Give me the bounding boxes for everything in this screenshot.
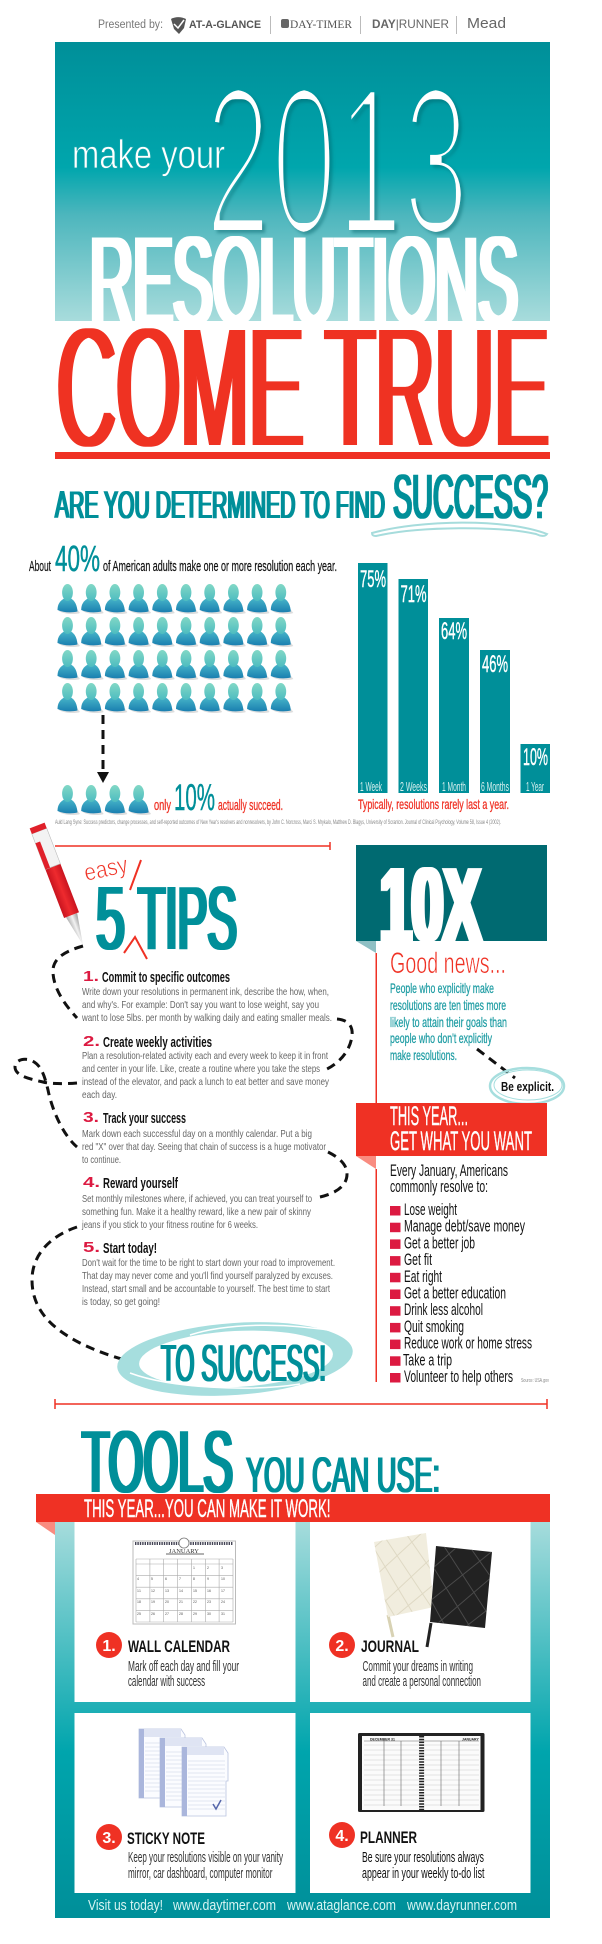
bar: 6 months: 46% <box>482 651 508 678</box>
bar chart: how long resolutions last <box>358 563 550 794</box>
callout: to success scribble: TO SUCCESS! <box>161 1335 326 1393</box>
badge 2 <box>329 1632 355 1658</box>
card: wall calendar <box>74 1522 296 1702</box>
stat: only 10 percent succeed <box>154 777 283 818</box>
footer: website links: www.daytimer.com <box>172 1897 276 1914</box>
tip 5: That day may never come and you'll find yourself paralyzed by excuses. <box>82 1270 333 1282</box>
logo: Mead: Mead <box>467 15 506 32</box>
resolutions list: Get a better job <box>404 1233 475 1252</box>
banner: you can make it work <box>36 1494 550 1535</box>
resolutions list <box>390 1200 532 1386</box>
bar: 1 month: 64% <box>441 618 467 645</box>
title: JOURNAL <box>361 1637 419 1656</box>
bar: 2 weeks: 71% <box>400 581 426 608</box>
banner: you can make it work: THIS YEAR...YOU CAN MAKE IT WORK! <box>84 1495 330 1523</box>
tip 3 <box>82 1109 326 1166</box>
header: presented by logos <box>98 15 506 34</box>
description: Commit your dreams in writing <box>362 1658 473 1675</box>
badge 1: 1. <box>102 1638 116 1655</box>
heading: tools you can use: TOOLS <box>82 1412 233 1511</box>
tip 2: instead of the elevator, and pack a lunch to eat better and save money <box>82 1076 330 1088</box>
icon: calendar: 45678910 <box>137 1577 225 1581</box>
presented by label: Presented by: <box>98 19 163 31</box>
panel: 10X good news <box>356 845 564 1104</box>
good news body: people who don't explicitly <box>390 1030 492 1046</box>
tip 1: Commit to specific outcomes <box>102 970 230 986</box>
teal banner <box>356 845 547 941</box>
stat: 40 percent of adults: of American adults make one or more resolution each year. <box>103 559 337 575</box>
bar: 1 month <box>439 618 469 794</box>
logo: At-A-Glance: AT-A-GLANCE <box>189 19 261 31</box>
tip 1: 1. <box>83 968 99 985</box>
bar: 1 week: 1 Week <box>360 779 382 794</box>
good news body: People who explicitly make <box>390 980 494 996</box>
footer: website links: www.ataglance.com <box>286 1897 396 1914</box>
stat: only 10 percent succeed: only <box>154 798 171 814</box>
heading: tools you can use: YOU CAN USE: <box>246 1447 440 1503</box>
icon: calendar: 123 <box>193 1566 223 1570</box>
description: calendar with success <box>128 1673 205 1690</box>
title: PLANNER <box>360 1828 417 1847</box>
icon: planner: DECEMBER 31 <box>370 1738 395 1742</box>
arrow: dashed down arrow <box>97 715 109 783</box>
icon: journals <box>374 1533 492 1648</box>
tip 4: 4. <box>83 1174 100 1191</box>
dashed path through the tips <box>15 946 352 1369</box>
tip 3: Mark down each successful day on a monthly calendar. Put a big <box>82 1128 312 1140</box>
heading: easy 5 tips <box>82 851 237 969</box>
title: make your: make your <box>72 133 225 177</box>
callout: to success scribble <box>115 1315 355 1403</box>
tip 2: 2. <box>83 1033 100 1050</box>
icon: planner: JANUARY <box>462 1738 479 1742</box>
resolutions list: Get fit <box>404 1250 432 1269</box>
footer: website links: Visit us today! <box>88 1897 163 1914</box>
tip 2: and center in your life. Like, create a routine where you take the steps <box>82 1063 320 1075</box>
title: WALL CALENDAR <box>128 1637 230 1656</box>
icon: calendar: JANUARY <box>169 1548 199 1555</box>
tip 4: something fun. Make it a healthy reward, like a new pair of skinny <box>82 1206 312 1218</box>
description: mirror, car dashboard, computer monitor <box>128 1865 273 1882</box>
stat: 40 percent of adults <box>29 538 337 579</box>
bar: 1 year <box>520 744 550 794</box>
logo: At-A-Glance <box>171 17 261 34</box>
stat: only 10 percent succeed: actually succeed. <box>218 798 283 814</box>
bar: 2 weeks <box>398 579 428 794</box>
badge 2: 2. <box>335 1638 349 1655</box>
icon: red pen <box>30 823 90 948</box>
resolutions list: Drink less alcohol <box>404 1300 483 1319</box>
tip 4: Set monthly milestones where, if achieved, you can treat yourself to <box>82 1193 312 1205</box>
tip 5: Instead, start small and be accountable to yourself. The best time to start <box>82 1283 330 1295</box>
panel: tools background <box>55 1522 550 1918</box>
tip 2: Plan a resolution-related activity each and every week to keep it in front <box>82 1050 328 1062</box>
resolutions list: Eat right <box>404 1267 442 1286</box>
resolutions list: Quit smoking <box>404 1317 464 1336</box>
description <box>128 1658 239 1690</box>
tip 5 <box>82 1239 335 1308</box>
tip 4 <box>81 1174 312 1231</box>
icon: calendar: 25262728293031 <box>137 1612 225 1616</box>
tip 3: to continue. <box>82 1154 121 1166</box>
tip 5: Don't wait for the time to be right to start down your road to improvement. <box>82 1257 335 1269</box>
bar: 6 months: 6 Months <box>481 779 509 794</box>
stat: only 10 percent succeed: 10% <box>174 777 215 818</box>
title: STICKY NOTE <box>127 1829 205 1848</box>
good news body: resolutions are ten times more <box>390 997 506 1013</box>
icon: planner <box>358 1733 484 1812</box>
be explicit callout: Be explicit. <box>501 1080 554 1094</box>
good news heading: Good news... <box>390 947 506 980</box>
tip 3: 3. <box>83 1109 99 1126</box>
badge 4: 4. <box>335 1828 349 1845</box>
logo: Day-Timer: DAY-TIMER <box>290 19 352 31</box>
tip 1: want to lose 5lbs. per month by walking daily and eating smaller meals. <box>81 1012 332 1024</box>
easy handwritten note: easy <box>82 851 130 887</box>
footer: website links: www.dayrunner.com <box>406 1897 517 1914</box>
badge 3: 3. <box>102 1830 116 1847</box>
people grid: 40 icons <box>58 584 293 713</box>
description <box>128 1849 283 1882</box>
tip 3: Track your success <box>103 1111 186 1127</box>
resolutions list: Lose weight <box>404 1200 457 1219</box>
banner text: THIS YEAR... <box>390 1101 468 1131</box>
description: appear in your weekly to-do list <box>362 1865 485 1882</box>
panel: this year get what you want <box>356 1101 549 1386</box>
description: Keep your resolutions visible on your vanity <box>128 1849 283 1866</box>
tip 1 <box>81 968 332 1024</box>
people row: four succeeding icons <box>58 785 151 815</box>
tip 1: Write down your resolutions in permanent ink, describe the how, when, <box>82 986 329 998</box>
badge 3 <box>96 1824 122 1850</box>
description: and create a personal connection <box>362 1673 481 1690</box>
logo: Day Runner: DAY|RUNNER <box>372 17 449 31</box>
description: Be sure your resolutions always <box>362 1849 484 1866</box>
resolutions list: Take a trip <box>403 1350 452 1369</box>
chart caption: Typically, resolutions rarely last a year. <box>358 796 509 812</box>
10X figure: 10X <box>380 846 481 964</box>
description: Mark off each day and fill your <box>128 1658 239 1675</box>
icon: calendar: 18192021222324 <box>137 1600 225 1604</box>
stat: 40 percent of adults: About <box>29 559 51 575</box>
tip 5: 5. <box>83 1239 100 1256</box>
intro text: Every January, Americans <box>390 1161 508 1180</box>
heading: easy 5 tips: 5 <box>96 869 125 969</box>
text: TIPS <box>138 869 237 969</box>
be explicit callout <box>477 1049 564 1104</box>
resolutions list: Volunteer to help others <box>404 1367 513 1386</box>
bar: 1 month: 1 Month <box>442 779 466 794</box>
icon: sticky notes <box>139 1729 228 1816</box>
stat: 40 percent of adults: 40% <box>55 538 100 579</box>
tip 2: each day. <box>82 1089 117 1101</box>
bar: 1 year: 10% <box>523 744 548 771</box>
intro text: commonly resolve to: <box>390 1177 488 1196</box>
red banner <box>356 1103 547 1156</box>
tip 5: Start today! <box>103 1241 157 1257</box>
good news body <box>390 980 507 1063</box>
tip 4: jeans if you stick to your fitness routine for 6 weeks. <box>81 1219 258 1231</box>
footer: website links <box>88 1897 517 1914</box>
card: sticky note <box>74 1713 296 1893</box>
red rule <box>55 452 550 459</box>
tip 5: is today, so get going! <box>82 1296 160 1308</box>
good news body: likely to attain their goals than <box>390 1014 507 1030</box>
tip 2: Create weekly activities <box>103 1035 212 1051</box>
resolutions list: Manage debt/save money <box>404 1217 525 1236</box>
description <box>362 1849 485 1882</box>
badge 4 <box>329 1822 355 1848</box>
hero panel background <box>55 42 550 321</box>
bar: 1 year: 1 Year <box>526 779 544 794</box>
heading: are you determined to find success <box>55 463 548 536</box>
source note: Source: USA.gov <box>521 1378 549 1384</box>
bar: 6 months <box>480 650 510 794</box>
icon: calendar <box>133 1538 236 1624</box>
description <box>362 1658 481 1690</box>
icon: calendar: 11121314151617 <box>137 1589 225 1593</box>
banner text <box>390 1101 532 1156</box>
card: journal <box>310 1522 530 1702</box>
tip 3: red "X" over that day. Seeing that chain of success is a huge motivator <box>82 1141 326 1153</box>
tip 2 <box>82 1033 330 1101</box>
tip 1: and why's. For example: Don't say you want to lose weight, say you <box>82 999 319 1011</box>
caret mark <box>124 860 147 959</box>
swoosh underline <box>372 523 547 536</box>
card: planner <box>310 1713 530 1893</box>
bar: 2 weeks: 2 Weeks <box>400 779 427 794</box>
bar: 1 week <box>358 563 388 794</box>
tip 4: Reward yourself <box>103 1176 178 1192</box>
good news body: make resolutions. <box>390 1047 457 1063</box>
badge 1 <box>96 1632 122 1658</box>
resolutions list: Get a better education <box>404 1284 506 1302</box>
bar: 1 week: 75% <box>360 566 386 593</box>
intro text <box>390 1161 508 1196</box>
